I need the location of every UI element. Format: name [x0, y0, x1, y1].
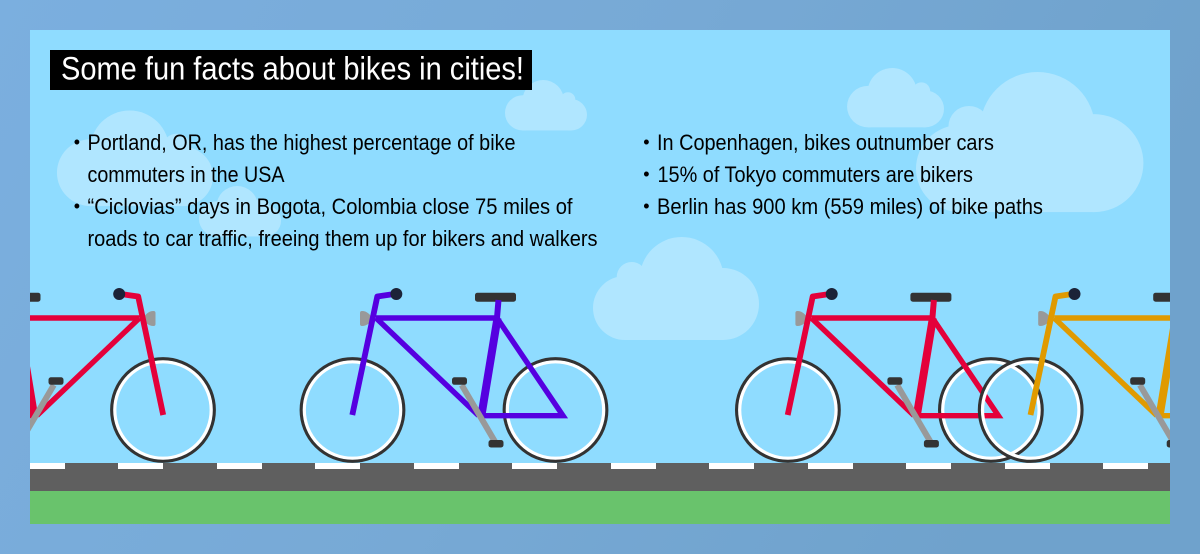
cloud: left small behind text [199, 186, 281, 236]
grass [30, 491, 1170, 524]
text block: right facts: • [643, 164, 650, 184]
bike: red right [737, 288, 1042, 461]
text block: left facts [74, 130, 598, 251]
cloud: left large behind text [57, 110, 213, 206]
cloud: middle [593, 237, 759, 340]
cloud: top right small [847, 68, 944, 127]
text block: left facts: commuters in the USA [88, 162, 285, 187]
bikes row [0, 288, 1200, 461]
cloud: top right large [916, 72, 1143, 212]
bike: orange [978, 288, 1170, 463]
road [30, 463, 1170, 491]
text block: right facts: Berlin has 900 km (559 miles) of bike paths [657, 194, 1043, 219]
text block: left facts: “Ciclovias” days in Bogota, Colombia close 75 miles of [88, 194, 573, 219]
bike: red left, facing right [30, 288, 216, 463]
text block: right facts: • [643, 132, 650, 152]
text block: left facts: Portland, OR, has the highest percentage of bike [88, 130, 516, 155]
text block: right facts [643, 130, 1043, 219]
cloud: small next to title [505, 80, 587, 130]
text block: left facts: roads to car traffic, freeing them up for bikers and walkers [88, 226, 598, 251]
text block: right facts: 15% of Tokyo commuters are bikers [658, 162, 973, 187]
title: Some fun facts about bikes in cities! [61, 50, 524, 86]
bike: purple [301, 288, 607, 461]
text block: right facts: In Copenhagen, bikes outnumber cars [657, 130, 994, 155]
text block: right facts: • [643, 196, 650, 216]
text block: left facts: • [74, 196, 80, 216]
text block: left facts: • [74, 132, 80, 152]
